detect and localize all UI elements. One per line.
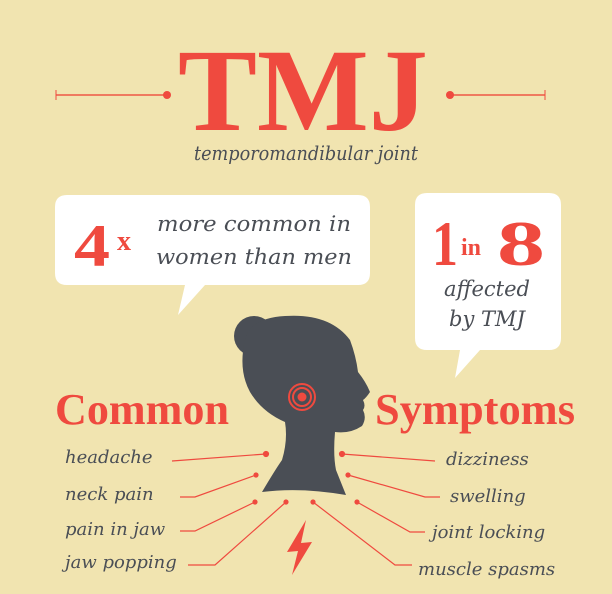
subtitle: temporomandibular joint (194, 141, 419, 165)
right symptoms list: swelling (450, 486, 526, 507)
symptom lines (172, 452, 440, 565)
title (56, 25, 545, 156)
callout: 1 in 8: by TMJ (449, 307, 527, 331)
icon: lightning (287, 520, 312, 575)
icon: pain circles (289, 384, 315, 410)
left symptoms list: headache (65, 447, 153, 468)
callout: 4x (55, 195, 370, 315)
callout: 4x: 4 (74, 213, 110, 279)
right symptoms list: joint locking (428, 522, 545, 543)
title: TMJ (178, 25, 428, 156)
heading: Symptoms: Symptoms (375, 385, 575, 434)
callout: 4x: women than men (156, 245, 352, 269)
head silhouette (234, 316, 370, 495)
callout: 1 in 8 (415, 193, 561, 378)
callout: 4x: x (117, 226, 131, 257)
heading: Common: Common (55, 385, 229, 434)
callout: 1 in 8: in (461, 235, 481, 261)
left symptoms list (61, 447, 177, 573)
left symptoms list: neck pain (65, 484, 154, 505)
left symptoms list: jaw popping (61, 552, 177, 573)
left symptoms list: pain in jaw (65, 519, 166, 540)
callout: 1 in 8: affected (444, 277, 530, 301)
callout: 1 in 8: 8 (497, 208, 545, 279)
callout: 1 in 8: 1 (432, 208, 458, 279)
right symptoms list: dizziness (446, 449, 529, 470)
callout: 4x: more common in (157, 212, 351, 236)
right symptoms list: muscle spasms (418, 559, 555, 580)
right symptoms list (418, 449, 555, 580)
